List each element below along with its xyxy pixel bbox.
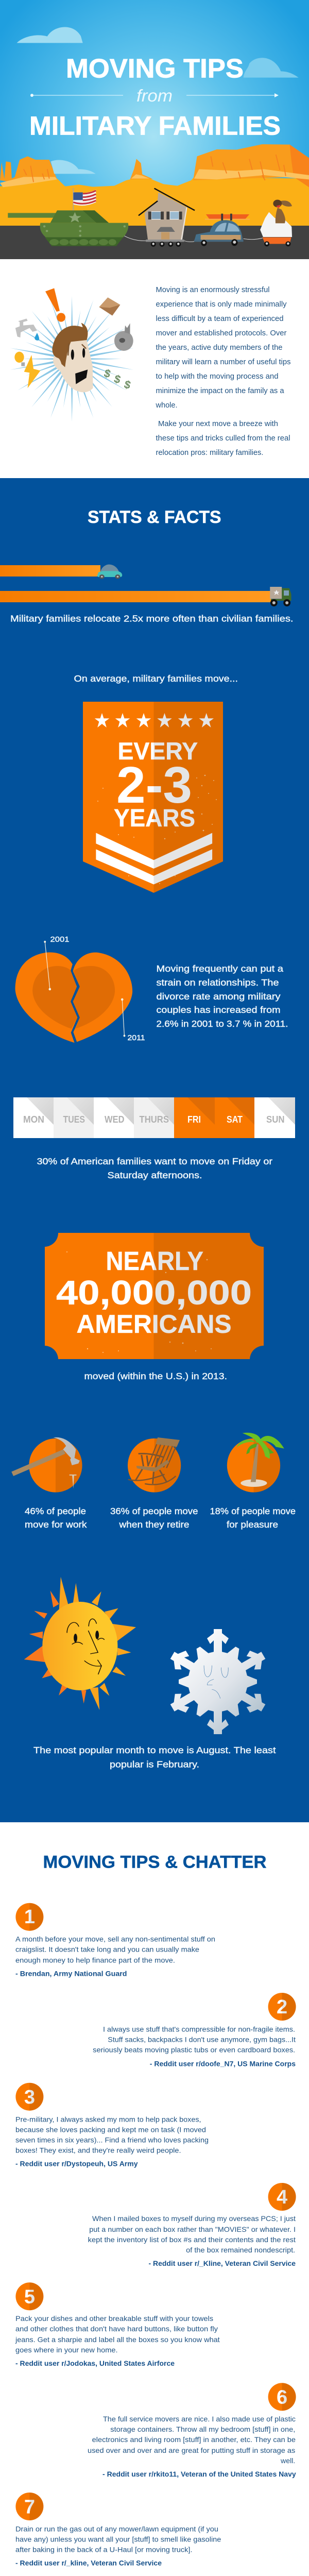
hair bbox=[52, 323, 88, 367]
tip 5: - Reddit user r/Jodokas, United States Airforce bbox=[15, 2359, 175, 2367]
icon: station wagon with kayak bbox=[194, 214, 250, 246]
icon group: reasons for moving bbox=[11, 1433, 284, 1493]
badge: nearly 40,000,000 americans: AMERICANS bbox=[76, 1310, 232, 1338]
number badge 4: 4 bbox=[277, 2187, 287, 2208]
tip 2: - Reddit user r/doofe_N7, US Marine Corps bbox=[150, 2059, 296, 2067]
tip 7 bbox=[15, 2493, 221, 2567]
head bbox=[53, 336, 93, 392]
heading: moving tips and chatter: MOVING TIPS & CHATTER bbox=[43, 1853, 267, 1872]
tow ropes bbox=[124, 235, 263, 242]
stat text: move for work bbox=[25, 1506, 87, 1530]
tip 6: storage containers. Throw all my bedroom [stuff] in one, bbox=[110, 2425, 295, 2433]
stat text: move for work: move for work bbox=[25, 1519, 87, 1530]
tip 6 bbox=[88, 2383, 296, 2478]
icon: tank with flag bbox=[8, 188, 128, 246]
number badge 5: 5 bbox=[24, 2286, 35, 2308]
text: intro paragraph: whole. bbox=[155, 401, 177, 410]
stat text: divorce rate bbox=[157, 963, 288, 1029]
illustration: stressed man with burst bbox=[10, 288, 134, 422]
cloud: upper left bbox=[17, 27, 83, 43]
text: intro paragraph: military will learn a number of useful tips bbox=[156, 358, 290, 366]
tip 1: A month before your move, sell any non-sentimental stuff on bbox=[15, 1935, 215, 1943]
chart: days of the week calendar: MON bbox=[23, 1114, 44, 1125]
number badge 2 bbox=[268, 1993, 296, 2021]
tip 2: I always use stuff that's compressible for non-fragile items. bbox=[103, 2025, 295, 2033]
tip 5: jeans. Get a sharpie and label all the boxes so you know what bbox=[15, 2335, 220, 2344]
badge: nearly 40,000,000 americans: 40,000,000 bbox=[56, 1274, 252, 1312]
text: intro paragraph: relocation pros: military families. bbox=[156, 449, 264, 457]
tip 4: - Reddit user r/_Kline, Veteran Civil Service bbox=[148, 2259, 296, 2267]
illustration: smiling sun for august bbox=[24, 1577, 136, 1710]
number badge 4 bbox=[268, 2183, 296, 2211]
badge: every 2-3 years: 2-3 bbox=[116, 756, 192, 814]
tip 7: after baking in the back of a U-Haul [or moving truck]. bbox=[15, 2545, 193, 2553]
tip 3: boxes! They exist, and they're really weird people. bbox=[15, 2146, 181, 2154]
chart: days of the week calendar: SUN bbox=[266, 1114, 284, 1125]
text: intro paragraph: less difficult by a team of experienced bbox=[156, 315, 283, 323]
text: intro paragraph: these tips and tricks culled from the real bbox=[156, 434, 290, 443]
stat text: relocate more often: Military families relocate 2.5x more often than civilian families. bbox=[10, 613, 294, 623]
tip 6: The full service movers are nice. I also made use of plastic bbox=[103, 2415, 296, 2423]
tip 4 bbox=[88, 2183, 296, 2267]
stat text: move when they retire: 36% of people move bbox=[110, 1506, 198, 1516]
number badge 7: 7 bbox=[24, 2497, 35, 2518]
icon: exclamation mark bbox=[45, 288, 65, 322]
title connector arrow with from: from bbox=[136, 86, 173, 105]
chart: days of the week calendar: WED bbox=[105, 1114, 125, 1125]
stat text: divorce rate: Moving frequently can put a bbox=[157, 963, 283, 974]
chevrons bbox=[96, 833, 212, 885]
stat text: move when they retire: when they retire bbox=[118, 1519, 190, 1530]
tip 3: because she loves packing and kept me on task (I moved bbox=[15, 2125, 206, 2133]
badge: nearly 40,000,000 americans: NEARLY bbox=[106, 1246, 203, 1276]
stat text: friday or saturday bbox=[37, 1156, 272, 1180]
illustration: convoy of tank, house, car and trailer bbox=[8, 188, 292, 247]
icon: house on wheels bbox=[139, 189, 195, 247]
icon: water drop bbox=[35, 333, 39, 341]
tip 5: and other clothes that don't have hard buttons, like button fly bbox=[15, 2325, 218, 2333]
number badge 2: 2 bbox=[277, 1996, 287, 2018]
text: intro paragraph bbox=[155, 286, 290, 457]
tip 4: of the box remained nondescript. bbox=[186, 2246, 295, 2254]
text: intro paragraph: the years, active duty members of the bbox=[156, 344, 282, 352]
chart: days of the week calendar: SAT bbox=[227, 1114, 243, 1125]
tip 3: Pre-military, I always asked my mom to help pack boxes, bbox=[15, 2115, 201, 2123]
cloud: behind mesa bbox=[51, 160, 96, 174]
chart: days of the week calendar: TUES bbox=[63, 1114, 85, 1125]
icon: light bulb bbox=[14, 352, 24, 363]
icon: civilian car bbox=[97, 565, 122, 579]
tip 5 bbox=[15, 2282, 220, 2367]
panel: stats and facts bbox=[0, 478, 309, 1822]
tip 7: have any) unless you want all your [stuff] to smell like gasoline bbox=[15, 2535, 221, 2543]
tip 2: seriously beats moving plastic tubs or even cardboard boxes. bbox=[93, 2045, 295, 2054]
tip 1: - Brendan, Army National Guard bbox=[15, 1969, 127, 1977]
chart: days of the week calendar: FRI bbox=[187, 1114, 201, 1125]
tip 1 bbox=[15, 1903, 215, 1977]
badge: every 2-3 years: YEARS bbox=[114, 805, 195, 832]
stat text: divorce rate: divorce rate among military bbox=[157, 991, 281, 1002]
title line 1: MOVING TIPS bbox=[66, 54, 244, 83]
panel: introduction bbox=[10, 286, 290, 457]
title line 2: MILITARY FAMILIES bbox=[29, 111, 281, 140]
text: intro paragraph: to help with the moving process and bbox=[156, 372, 278, 381]
stat text: friday or saturday: 30% of American families want to move on Friday or bbox=[37, 1156, 272, 1166]
stat text: friday or saturday: Saturday afternoons. bbox=[107, 1170, 202, 1180]
illustration: desert landscape bbox=[0, 144, 309, 227]
text: intro paragraph: mover and established protocols. Over bbox=[156, 329, 287, 337]
badge: nearly 40,000,000 americans bbox=[45, 1233, 264, 1359]
road bbox=[0, 226, 309, 259]
heading: stats and facts: STATS & FACTS bbox=[88, 507, 221, 527]
tip 4: put a number on each box rather than "MOVIES" or whatever. I bbox=[89, 2225, 296, 2233]
number badge 5 bbox=[15, 2282, 43, 2310]
illustration: grumpy snowflake for february bbox=[170, 1629, 266, 1734]
stat text: popular months bbox=[33, 1745, 276, 1769]
tip 6: electronics and living room [stuff] in another, etc. They can be bbox=[92, 2435, 296, 2444]
icon: faucet bbox=[15, 318, 37, 337]
tip 7: - Reddit user r/_kline, Veteran Civil Service bbox=[15, 2558, 162, 2567]
number badge 7 bbox=[15, 2493, 43, 2520]
text: intro paragraph: Make your next move a breeze with bbox=[158, 420, 278, 428]
tip 4: kept the inventory list of box #s and their contents and the rest bbox=[88, 2235, 296, 2244]
title connector arrow with from bbox=[30, 86, 279, 105]
tip 6: used over and over and are great for putting stuff in storage as bbox=[88, 2446, 295, 2454]
stat text: move for pleasure: 18% of people move bbox=[210, 1506, 296, 1516]
icon: dollar signs: $ bbox=[123, 378, 132, 392]
badge: every 2-3 years: EVERY bbox=[117, 737, 198, 765]
stat text: popular months: The most popular month to move is August. The least bbox=[33, 1745, 276, 1755]
tip 1: enough money to help finance part of the move. bbox=[15, 1956, 175, 1964]
panel: moving tips and chatter bbox=[15, 1853, 296, 2567]
tip 6: well. bbox=[280, 2456, 295, 2465]
icon: palm tree bbox=[227, 1433, 284, 1493]
text: intro paragraph: experience that is only made minimally bbox=[156, 300, 287, 309]
tip 5: Pack your dishes and other breakable stuff with your towels bbox=[15, 2314, 213, 2323]
icon: lightning bolt bbox=[24, 355, 40, 388]
number badge 1: 1 bbox=[24, 1906, 35, 1928]
badge: every 2-3 years bbox=[83, 702, 223, 893]
stat text: move when they retire bbox=[110, 1506, 198, 1530]
stat text: move for pleasure: for pleasure bbox=[227, 1519, 278, 1530]
tip 3: seven times in six years)... Find a friend who loves packing bbox=[15, 2136, 209, 2144]
icon: cardboard box bbox=[99, 297, 120, 316]
number badge 6: 6 bbox=[277, 2386, 287, 2408]
text: intro paragraph: minimize the impact on the family as a bbox=[156, 387, 284, 395]
stars bbox=[95, 713, 214, 727]
icon: dollar signs: $ bbox=[113, 372, 122, 386]
icon: overloaded trailer with dog bbox=[260, 200, 292, 246]
tip 7: Drain or run the gas out of any mower/lawn equipment (if you bbox=[15, 2524, 218, 2533]
stat text: move for pleasure bbox=[210, 1506, 296, 1530]
tip 3: - Reddit user r/Dystopeuh, US Army bbox=[15, 2159, 138, 2167]
icon: duct tape bbox=[114, 331, 133, 351]
label: 2011: 2011 bbox=[128, 1033, 145, 1042]
stat text: move for work: 46% of people bbox=[25, 1506, 86, 1516]
number badge 6 bbox=[268, 2383, 296, 2411]
stat text: divorce rate: 2.6% in 2001 to 3.7 % in 2011. bbox=[157, 1019, 288, 1029]
tip 2 bbox=[93, 1993, 296, 2067]
tip 2: Stuff sacks, backpacks I don't use anymore, gym bags...It bbox=[108, 2035, 296, 2043]
panel: hero illustration bbox=[0, 0, 309, 259]
stat text: popular months: popular is February. bbox=[110, 1759, 199, 1769]
icon: dollar signs bbox=[102, 367, 132, 392]
cloud: upper right bbox=[244, 58, 299, 78]
label: 2001: 2001 bbox=[50, 935, 69, 944]
icon: hammer and nail bbox=[11, 1437, 82, 1493]
chart: relocation frequency bars bbox=[0, 565, 291, 606]
stat text: divorce rate: strain on relationships. The bbox=[157, 977, 279, 988]
stat text: on average: On average, military families move... bbox=[74, 673, 238, 684]
number badge 3 bbox=[15, 2083, 43, 2111]
chart: days of the week calendar: THURS bbox=[139, 1114, 169, 1125]
tip 4: When I mailed boxes to myself during my overseas PCS; I just bbox=[92, 2214, 296, 2223]
number badge 3: 3 bbox=[24, 2087, 35, 2108]
tip 3 bbox=[15, 2083, 209, 2167]
stat text: moved in 2013: moved (within the U.S.) in 2013. bbox=[84, 1371, 227, 1381]
number badge 1 bbox=[15, 1903, 43, 1931]
chart: broken heart divorce rates bbox=[15, 941, 132, 1043]
icon: dollar signs: $ bbox=[102, 367, 112, 380]
stat text: divorce rate: couples has increased from bbox=[157, 1005, 280, 1015]
chart: days of the week calendar bbox=[13, 1097, 295, 1138]
tip 1: craigslist. It doesn't take long and you can usually make bbox=[15, 1945, 199, 1953]
icon: rocking chair bbox=[128, 1437, 181, 1493]
text: intro paragraph: Moving is an enormously stressful bbox=[156, 286, 270, 294]
tip 5: goes where in your new home. bbox=[15, 2346, 117, 2354]
tip 6: - Reddit user r/rkito11, Veteran of the United States Navy bbox=[102, 2470, 296, 2478]
icon: military truck bbox=[270, 587, 291, 606]
